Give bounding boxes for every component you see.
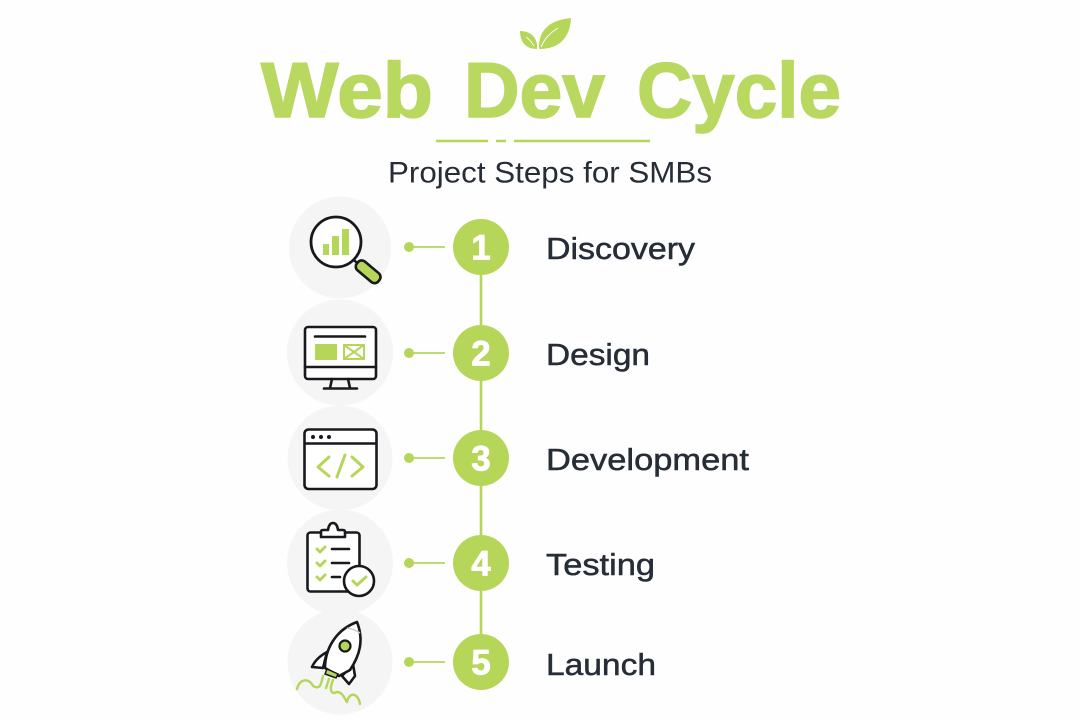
connector (404, 348, 445, 358)
label: Development (546, 442, 749, 477)
step 4: testing (287, 510, 655, 616)
subtitle: Project Steps for SMBs (388, 156, 712, 190)
connector (404, 453, 445, 463)
label: Design (546, 337, 650, 372)
label: Discovery (546, 231, 696, 266)
title: Dev (464, 46, 606, 134)
step 3: development (288, 406, 749, 510)
icon: monitor wireframe (287, 300, 393, 406)
title: Web (261, 46, 433, 134)
number badge 5: 5 (471, 644, 491, 682)
number badge 2: 2 (471, 334, 491, 374)
connector (404, 242, 445, 252)
step 1: discovery (289, 196, 696, 298)
number badge 1: 1 (471, 228, 491, 268)
icon: rocket (288, 610, 392, 714)
step 2: design (287, 300, 650, 406)
title (261, 46, 841, 134)
number badge 3 (453, 430, 509, 486)
title: Cycle (637, 46, 841, 134)
icon: code window (288, 406, 392, 510)
number badge 3: 3 (471, 440, 491, 478)
number badge 5 (453, 634, 509, 690)
timeline spine (480, 247, 482, 662)
number badge 4 (453, 535, 509, 591)
label: Launch (546, 647, 656, 682)
icon: leaves (520, 18, 571, 49)
icon: magnifier with bar chart (289, 196, 391, 298)
step 5: launch (288, 610, 656, 714)
label: Testing (546, 547, 655, 582)
number badge 1 (453, 219, 509, 275)
icon: clipboard checklist (287, 510, 393, 616)
connector (404, 657, 445, 667)
number badge 2 (453, 325, 509, 381)
connector (404, 558, 445, 568)
number badge 4: 4 (471, 544, 491, 584)
